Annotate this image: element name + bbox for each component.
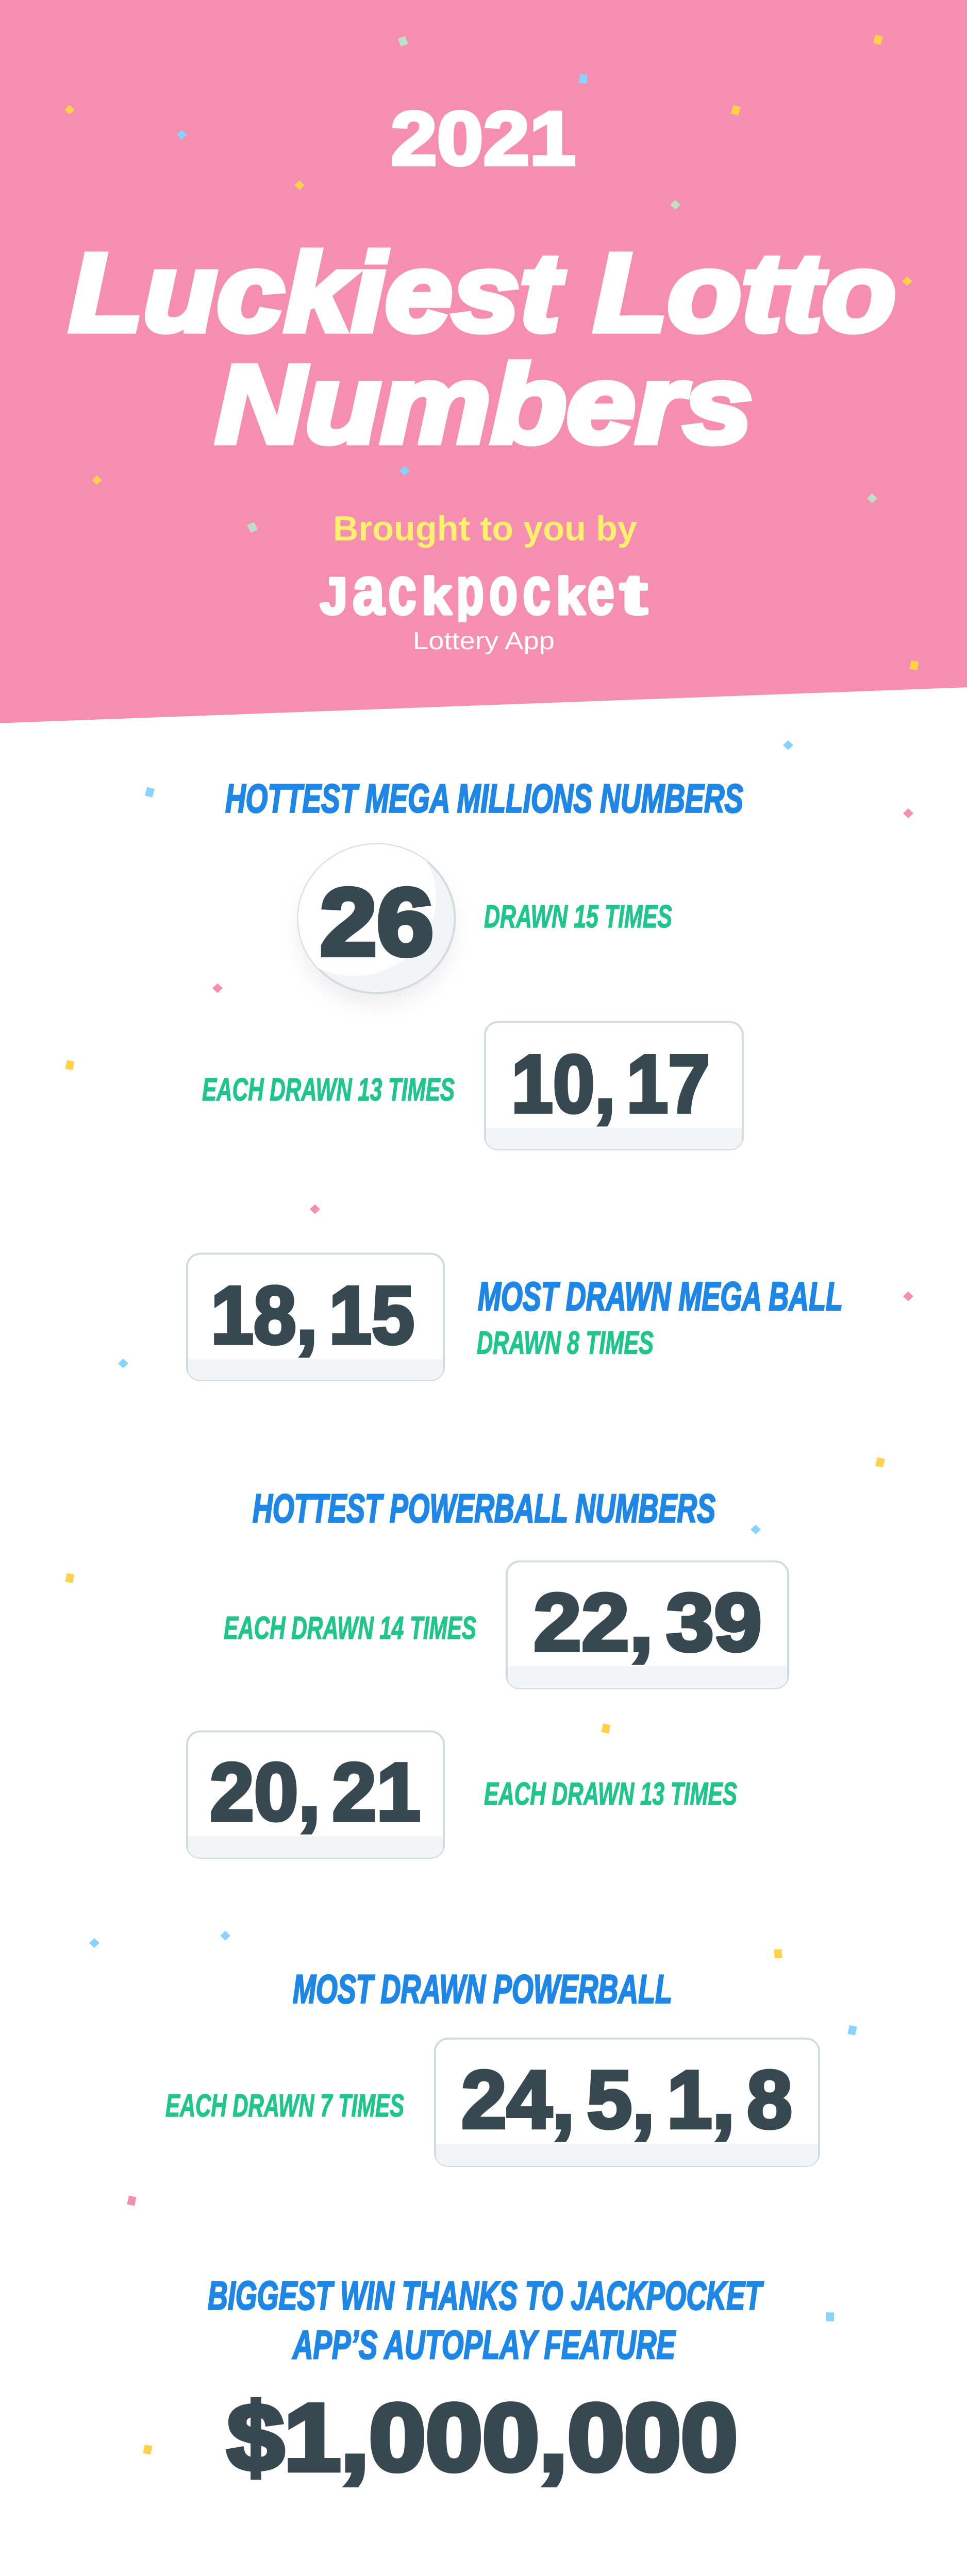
logo: jackpocket: p xyxy=(456,553,484,629)
label: drawn 8 times: DRAWN 8 TIMES xyxy=(477,1326,654,1361)
card: 18, 15: 18, 15 xyxy=(211,1269,414,1361)
card: 24, 5, 1, 8: 24, 5, 1, 8 xyxy=(461,2054,792,2145)
logo: jackpocket: c xyxy=(388,553,416,629)
heading second line: APP’S AUTOPLAY FEATURE xyxy=(292,2323,676,2367)
section: hottest powerball numbers xyxy=(187,1486,788,1858)
lottery app: Lottery App xyxy=(413,626,555,655)
label: each drawn 13 times: EACH DRAWN 13 TIMES xyxy=(484,1777,737,1812)
section: biggest win xyxy=(208,2274,764,2491)
heading: MOST DRAWN POWERBALL xyxy=(293,1967,672,2011)
card: 22, 39: 22, 39 xyxy=(533,1576,762,1668)
confetti in header xyxy=(64,35,919,670)
logo: jackpocket: J xyxy=(320,567,347,625)
card: 22, 39 xyxy=(507,1562,788,1688)
card: 20, 21: 20, 21 xyxy=(210,1745,421,1838)
label: each drawn 7 times: EACH DRAWN 7 TIMES xyxy=(165,2088,404,2124)
card: 10, 17 xyxy=(485,1022,743,1149)
confetti in body xyxy=(65,740,913,2455)
logo: jackpocket: k xyxy=(422,567,452,625)
ball: 26 xyxy=(297,843,456,1005)
logo: jackpocket: e xyxy=(587,553,614,629)
label: each drawn 13 times: EACH DRAWN 13 TIMES xyxy=(202,1072,455,1107)
title xyxy=(69,230,896,466)
title: Numbers xyxy=(215,342,753,466)
section: most drawn mega ball xyxy=(187,1253,843,1380)
logo: jackpocket: a xyxy=(353,553,385,629)
ball: 26: 26 xyxy=(320,870,434,975)
title: Luckiest Lotto xyxy=(69,230,896,354)
label: drawn 15 times: DRAWN 15 TIMES xyxy=(484,900,672,935)
logo: jackpocket: c xyxy=(523,553,551,629)
card: 10, 17: 10, 17 xyxy=(511,1038,710,1130)
year: 2021 xyxy=(391,96,576,181)
brought to you by: Brought to you by xyxy=(333,509,637,548)
panel: pink header xyxy=(0,0,967,723)
section: most drawn powerball xyxy=(165,1967,819,2166)
logo: jackpocket: t xyxy=(620,563,647,626)
card: 20, 21 xyxy=(187,1732,444,1858)
label: each drawn 14 times: EACH DRAWN 14 TIMES xyxy=(224,1611,476,1646)
logo: jackpocket: o xyxy=(489,553,518,629)
amount: $1,000,000 xyxy=(227,2385,738,2491)
logo: jackpocket: k xyxy=(556,567,586,625)
section: hottest mega millions numbers xyxy=(202,776,743,1149)
heading: HOTTEST POWERBALL NUMBERS xyxy=(253,1486,715,1531)
card: 24, 5, 1, 8 xyxy=(435,2039,819,2166)
header background xyxy=(0,0,967,723)
card: 18, 15 xyxy=(187,1253,444,1380)
